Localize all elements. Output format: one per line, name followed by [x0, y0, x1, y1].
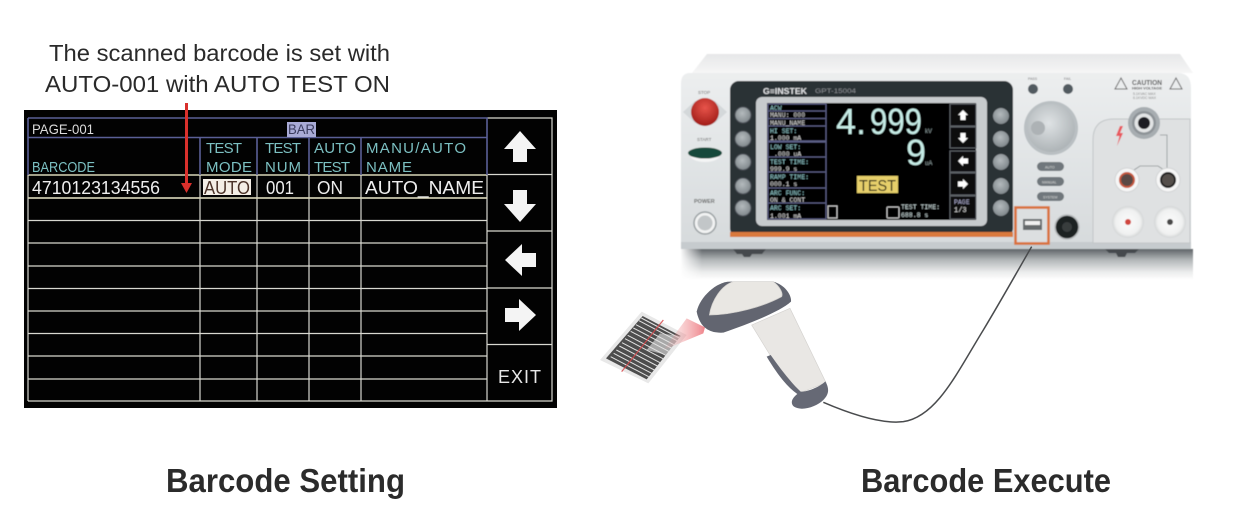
table data row: 001 — [266, 178, 294, 198]
screen parameter text: ARC FUNC: — [770, 190, 805, 197]
screen parameter text: ARC SET: — [770, 205, 801, 212]
screen parameter text: 000.1 s — [770, 181, 797, 188]
red and black terminals — [1115, 168, 1180, 192]
screen parameter text: MANU: 000 — [770, 112, 805, 119]
screen parameter text: .000 uA — [774, 151, 801, 158]
instrument feet — [733, 249, 1139, 257]
screen arrow buttons: 1/3 — [954, 207, 967, 215]
table column headers: MANU/AUTO — [366, 140, 466, 157]
screen parameter text: 999.9 s — [770, 166, 797, 173]
page label: PAGE-001 — [32, 121, 94, 137]
screen small icons — [828, 206, 899, 218]
screen arrow buttons: PAGE — [954, 199, 970, 206]
mode buttons: MANUAL — [1042, 180, 1057, 184]
voltage reading: 4. — [836, 101, 866, 142]
mode buttons: AUTO — [1045, 166, 1055, 170]
brand: G≡INSTEK — [763, 86, 808, 96]
screen parameter text: ACW — [770, 105, 782, 112]
panel: tester instrument — [680, 54, 1193, 281]
table data row: AUTO_NAME — [365, 178, 484, 199]
lightning indicator — [1116, 126, 1123, 146]
scanner grip — [767, 355, 828, 409]
pass and fail lamps — [1028, 77, 1073, 94]
screen parameter text: RAMP TIME: — [770, 174, 809, 181]
stop button — [683, 90, 727, 126]
instrument front — [681, 73, 1191, 249]
instrument top — [692, 54, 1193, 73]
rotary knob — [1024, 101, 1078, 155]
scanner cable to USB — [823, 247, 1032, 422]
caution label: 5.1KVAC MAX — [1133, 92, 1156, 96]
display bezel — [730, 81, 1013, 237]
heading: Barcode Execute: Barcode Execute — [861, 462, 1111, 499]
right soft keys — [993, 108, 1009, 216]
TEST status badge: TEST — [859, 178, 896, 195]
table column headers: NAME — [366, 159, 412, 176]
pass and fail lamps: PASS — [1028, 77, 1038, 81]
caution label — [1115, 78, 1182, 100]
scanner head cover — [709, 282, 782, 315]
icon: arrow left — [505, 244, 536, 276]
terminal wiring lines — [1134, 135, 1167, 175]
mode buttons — [1037, 162, 1064, 201]
BAR tag: BAR — [288, 121, 315, 137]
caution label: HIGH VOLTAGE — [1132, 86, 1163, 90]
table column headers: TEST — [314, 159, 350, 176]
icon: arrow down — [504, 190, 536, 222]
laser beam — [663, 318, 705, 350]
start button: START — [697, 137, 712, 142]
voltage reading — [836, 101, 932, 142]
screen parameter text — [770, 105, 809, 220]
heading: Barcode Setting: Barcode Setting — [166, 462, 405, 499]
screen parameter text: HI SET: — [770, 128, 797, 135]
current reading: 9 — [906, 132, 926, 173]
screen parameter text: LOW SET: — [770, 144, 801, 151]
table column headers: MODE — [206, 159, 252, 176]
stop button: STOP — [698, 90, 710, 95]
panel: barcode setting screen — [24, 110, 557, 408]
callout: scanned barcode note: AUTO-001 with AUTO TEST ON — [45, 71, 390, 97]
screen parameter text: TEST TIME: — [770, 159, 809, 166]
caution label: 6.1KVDC MAX — [1133, 96, 1157, 100]
laser scan line — [622, 320, 663, 372]
power button — [694, 199, 716, 234]
screen arrow buttons — [950, 104, 976, 219]
barcode label — [600, 312, 687, 383]
power button: POWER — [694, 199, 715, 205]
table column headers: TEST — [265, 140, 301, 157]
exit button label: EXIT — [498, 367, 541, 387]
current reading: uA — [925, 161, 932, 167]
test time readout: TEST TIME: — [901, 204, 940, 211]
table column headers: BARCODE — [32, 159, 95, 176]
screen parameter text: 1.001 mA — [770, 213, 801, 220]
test time readout: 688.8 s — [901, 212, 928, 219]
table data row — [32, 178, 484, 199]
interface connector — [1055, 215, 1079, 239]
binding post knobs — [1112, 206, 1186, 238]
table column headers: NUM — [265, 159, 301, 176]
scanner head — [697, 282, 791, 333]
scanner group — [600, 247, 1032, 422]
table column headers: TEST — [206, 140, 242, 157]
pass and fail lamps: FAIL — [1064, 77, 1071, 81]
voltage reading: 999 — [870, 101, 922, 142]
screen parameter text: ON & CONT — [770, 197, 805, 204]
mode buttons: SYSTEM — [1043, 196, 1057, 200]
USB port highlight — [1016, 208, 1048, 244]
table data row: 4710123134556 — [32, 178, 160, 198]
scanner handle — [752, 308, 826, 393]
table column headers — [32, 140, 466, 176]
brand: GPT-15004 — [815, 88, 856, 95]
screen — [767, 103, 976, 220]
table column headers: AUTO — [314, 140, 356, 157]
instrument shadow — [680, 249, 1193, 281]
screen parameter text: 1.000 mA — [770, 135, 801, 142]
icon: arrow up — [504, 131, 536, 162]
callout: scanned barcode note: The scanned barcode is set with — [49, 40, 390, 66]
silver screen frame — [756, 97, 987, 226]
caution label: CAUTION — [1132, 80, 1162, 87]
callout: scanned barcode note — [45, 40, 390, 97]
left soft keys — [735, 107, 751, 216]
icon: arrow right — [505, 299, 536, 331]
table data row: AUTO — [204, 178, 250, 198]
high voltage jack — [1128, 107, 1160, 139]
voltage reading: kV — [925, 129, 932, 135]
table data row: ON — [317, 178, 343, 198]
start button — [688, 137, 722, 162]
brand — [763, 86, 856, 96]
screen parameter text: MANU_NAME — [770, 120, 805, 127]
arrow: note to table row — [181, 103, 192, 193]
test time readout — [901, 204, 940, 219]
screen parameter column — [768, 104, 826, 219]
output terminal panel — [1093, 119, 1190, 243]
